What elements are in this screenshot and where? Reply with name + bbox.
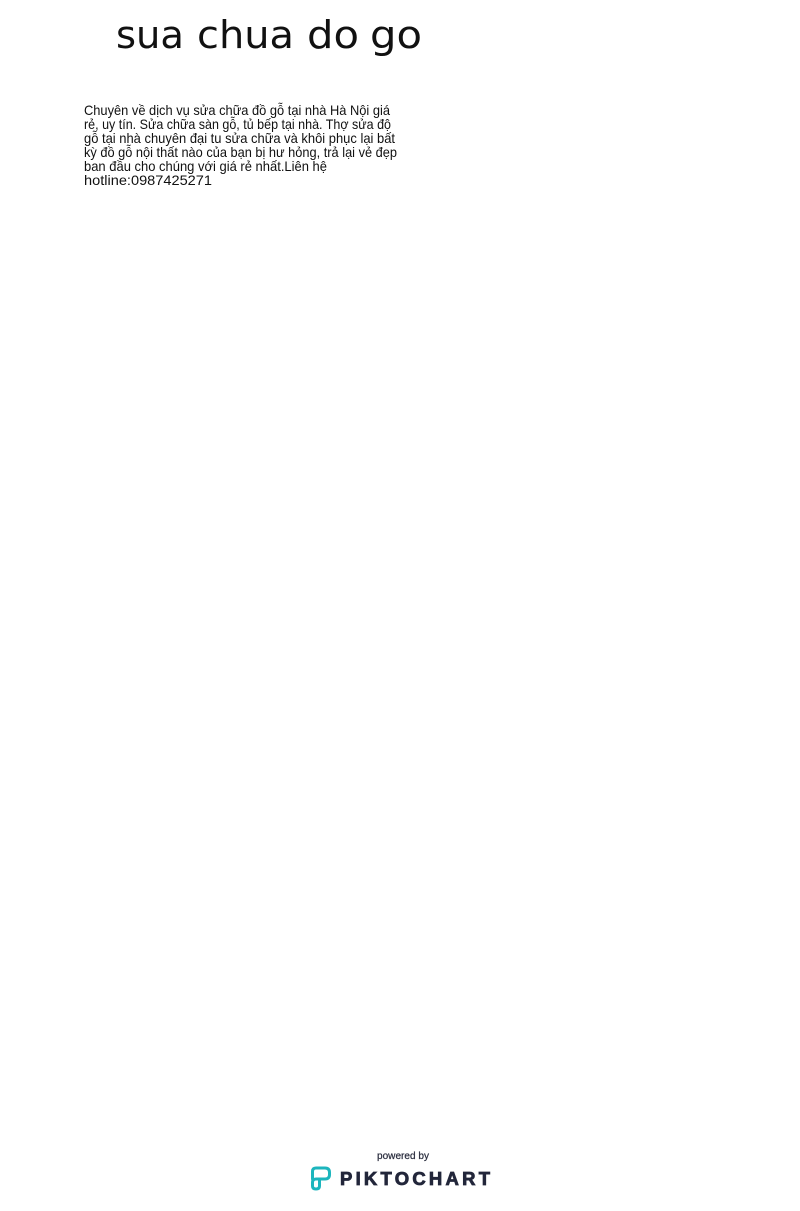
title [116, 13, 422, 58]
Piktochart wordmark: PIKTOCHART [340, 1168, 491, 1189]
icon: Piktochart logo [312, 1168, 330, 1189]
title: do [307, 13, 359, 58]
title: go [370, 13, 422, 58]
text block: service description: ban đầu cho chúng với giá rẻ nhất.Liên hệ [84, 158, 327, 174]
text block: service description [84, 102, 397, 188]
footer: powered by Piktochart [312, 1150, 491, 1189]
title: sua [116, 13, 184, 58]
text block: service description: rẻ, uy tín. Sửa chữa sàn gỗ, tủ bếp tại nhà. Thợ sửa độ [84, 116, 391, 132]
text block: service description: kỳ đồ gỗ nội thất nào của bạn bị hư hỏng, trả lại vẻ đẹp [84, 144, 397, 160]
powered by label: powered by [377, 1150, 430, 1162]
text block: service description: gỗ tại nhà chuyên đại tu sửa chữa và khôi phục lại bất [84, 130, 395, 146]
text block: service description: hotline:0987425271 [84, 172, 212, 188]
text block: service description: Chuyên về dịch vụ sửa chữa đồ gỗ tại nhà Hà Nội giá [84, 102, 390, 118]
title: chua [197, 13, 294, 58]
